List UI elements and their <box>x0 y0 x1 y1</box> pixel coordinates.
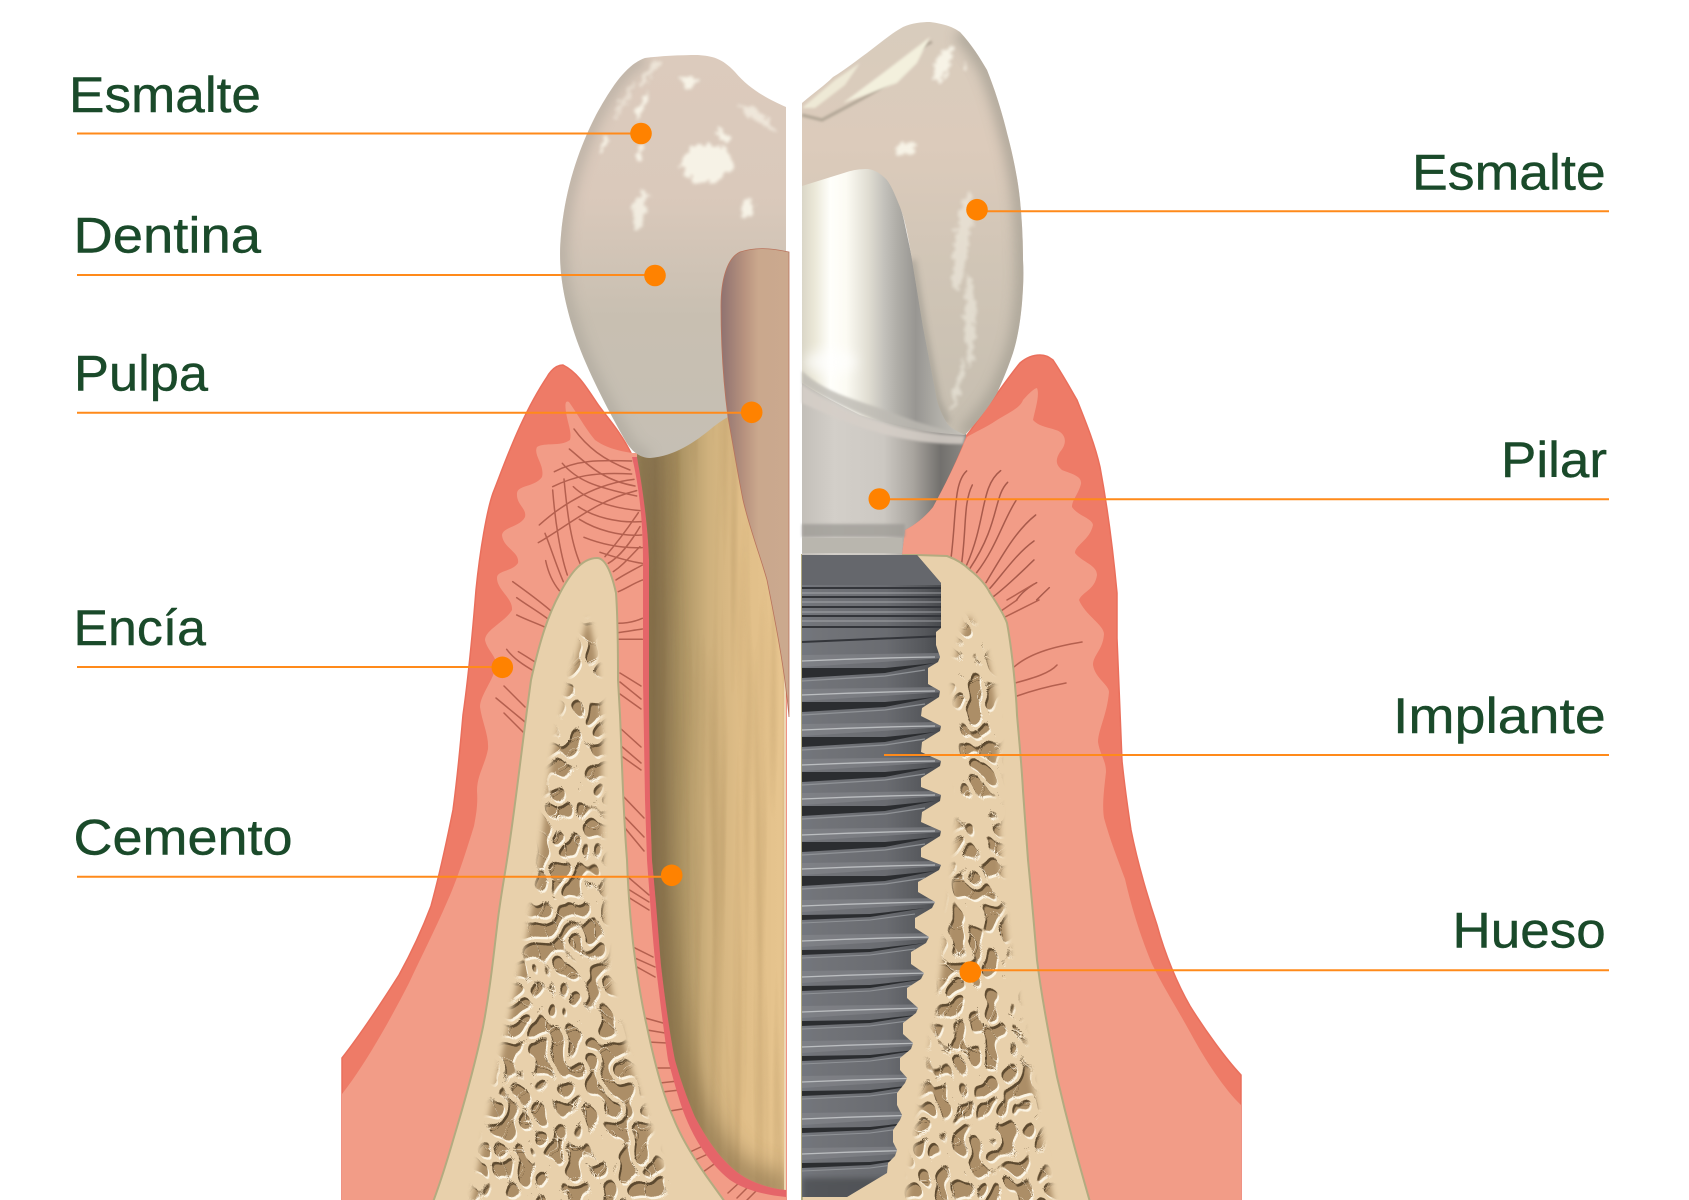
marker <box>630 123 652 144</box>
illustration: natural tooth (left half) <box>342 55 790 1200</box>
pulp <box>721 249 789 717</box>
periodontal fibres: implant <box>951 471 1082 696</box>
leader line <box>77 274 654 276</box>
marker <box>644 265 666 286</box>
leader line <box>880 498 1609 500</box>
label: Esmalte <box>69 67 261 123</box>
leader line <box>884 754 1609 756</box>
callout: Esmalte (natural tooth) <box>69 67 652 144</box>
label: Esmalte <box>1412 144 1606 200</box>
marker <box>661 864 682 886</box>
cementum strip <box>632 457 786 1197</box>
gum: implant <box>900 355 1241 1200</box>
leader line <box>978 210 1609 212</box>
marker <box>741 402 762 423</box>
root dentine <box>637 400 790 1190</box>
leader line <box>77 132 640 134</box>
callout: Esmalte (implant) <box>966 144 1609 220</box>
label: Pilar <box>1501 432 1607 488</box>
periodontal fibres: natural tooth <box>496 429 757 1200</box>
crown: implant <box>802 22 1023 435</box>
callout: Dentina <box>74 208 666 286</box>
callout: Encía <box>74 600 513 678</box>
marker <box>868 488 890 510</box>
label: Cemento <box>74 810 292 866</box>
marker <box>966 199 988 220</box>
marker <box>960 961 981 983</box>
label: Encía <box>74 600 206 656</box>
gum: natural tooth <box>342 365 786 1200</box>
implant screw <box>802 555 947 1200</box>
illustration: implant (right half) <box>802 22 1241 1200</box>
leader line <box>77 666 501 668</box>
label: Pulpa <box>74 345 208 401</box>
bone: natural tooth <box>400 558 725 1200</box>
label: Dentina <box>74 208 261 264</box>
label: Hueso <box>1452 902 1606 958</box>
leader line <box>971 969 1609 971</box>
leader line <box>77 412 751 414</box>
abutment collar <box>802 370 966 555</box>
abutment post <box>802 165 965 444</box>
callout: Pilar <box>868 432 1609 510</box>
crown: natural tooth <box>560 55 786 458</box>
bone: implant <box>802 555 1090 1200</box>
leader line <box>77 876 671 878</box>
callout: Hueso <box>960 902 1609 983</box>
callout: Pulpa <box>74 345 762 423</box>
label: Implante <box>1393 688 1606 744</box>
marker <box>492 656 513 678</box>
callout: Cemento <box>74 810 682 886</box>
